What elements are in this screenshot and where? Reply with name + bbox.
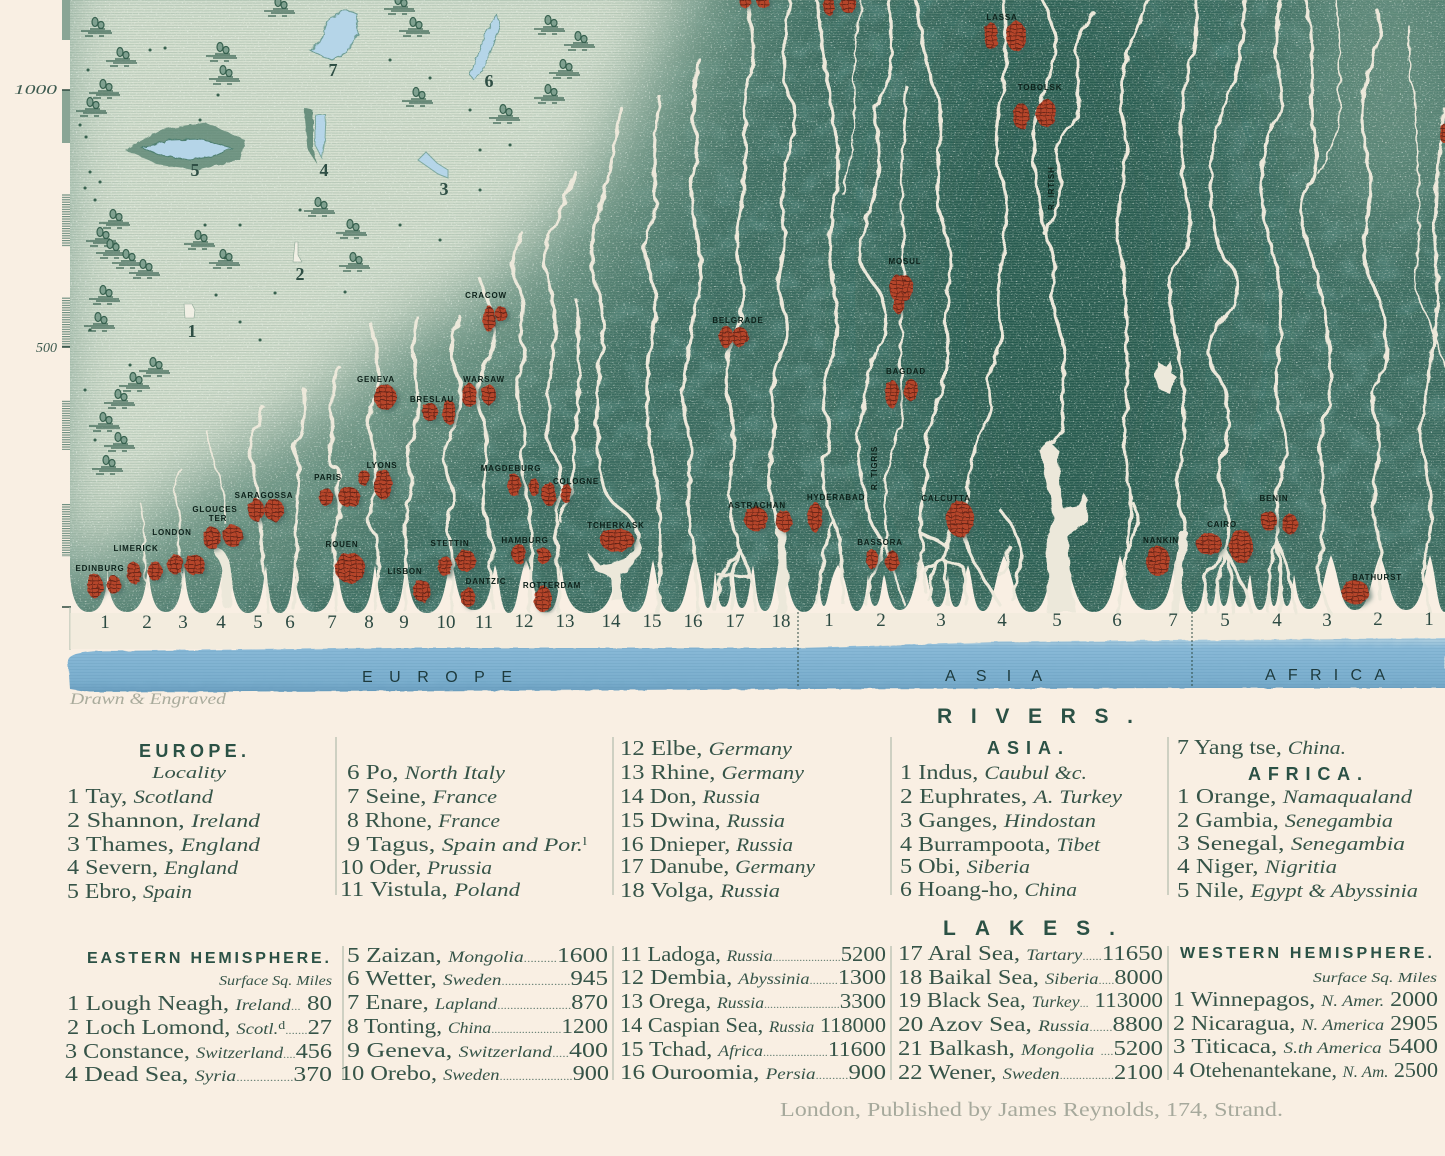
Yang tse and Africa rivers: 1 Orange, Namaqualand bbox=[1177, 784, 1413, 808]
rivers heading: RIVERS. bbox=[937, 705, 1133, 728]
river numbers on coast: 5 bbox=[1052, 610, 1062, 631]
Europe rivers column one: 3 Thames, England bbox=[67, 832, 261, 856]
Europe rivers column two: 10 Oder, Prussia bbox=[340, 855, 492, 879]
river numbers on coast: 4 bbox=[1272, 610, 1282, 631]
lake 1 bbox=[184, 304, 196, 341]
Yang tse and Africa rivers: AFRICA. bbox=[1248, 764, 1362, 784]
Eastern hemisphere column two: 9 Geneva, Switzerland .....400 bbox=[347, 1038, 608, 1062]
scale ruler bbox=[14, 0, 71, 607]
Eastern hemisphere column one: d bbox=[278, 1018, 285, 1032]
city names: LONDON bbox=[152, 528, 192, 537]
city names: NANKIN bbox=[1143, 536, 1179, 545]
lake 4 bbox=[304, 108, 328, 180]
lake 7 bbox=[310, 9, 358, 80]
Europe rivers column three: 17 Danube, Germany bbox=[620, 854, 816, 878]
Europe rivers column one: 4 Severn, England bbox=[67, 855, 239, 879]
Europe rivers column one: Locality bbox=[151, 763, 227, 782]
city names: BAGDAD bbox=[886, 367, 926, 376]
city names: BENIN bbox=[1260, 494, 1288, 503]
city names: ROUEN bbox=[326, 540, 358, 549]
cities: red blocks bbox=[87, 0, 1445, 612]
Asia rivers: 3 Ganges, Hindostan bbox=[900, 808, 1096, 832]
Europe rivers column one bbox=[67, 741, 261, 903]
city names: ROTTERDAM bbox=[523, 581, 581, 590]
Eastern hemisphere column two bbox=[340, 943, 609, 1085]
lake 6: 6 bbox=[484, 71, 494, 91]
city names: SARAGOSSA bbox=[235, 491, 293, 500]
river numbers on coast: 7 bbox=[1168, 610, 1178, 631]
river numbers on coast: 5 bbox=[1220, 610, 1230, 631]
city names: BELGRADE bbox=[712, 316, 764, 325]
Asia rivers: 2 Euphrates, A. Turkey bbox=[900, 784, 1123, 808]
Yang tse and Africa rivers: 3 Senegal, Senegambia bbox=[1177, 831, 1405, 855]
city names: LIMERICK bbox=[113, 544, 159, 553]
Western hemisphere column: Surface Sq. Miles bbox=[1313, 971, 1438, 986]
lakes list bbox=[65, 941, 1438, 1086]
scale label 500: 500 bbox=[36, 341, 57, 356]
Eastern hemisphere column one: 4 Dead Sea, Syria ................. 370 bbox=[65, 1062, 332, 1086]
publisher line: London, Published by James Reynolds, 174, Strand. bbox=[780, 1099, 1283, 1121]
city names: HAMBURG bbox=[501, 536, 549, 545]
river numbers on coast: 4 bbox=[216, 612, 226, 633]
river numbers on coast: 5 bbox=[253, 612, 263, 633]
Western hemisphere column: 4 Otehenantekane, N. Am. 2500 bbox=[1173, 1058, 1438, 1082]
lake 2 bbox=[293, 242, 304, 284]
Eastern hemisphere column three: 14 Caspian Sea, Russia 118000 bbox=[620, 1013, 886, 1037]
lake 3: 3 bbox=[440, 179, 448, 199]
river numbers on coast: 2 bbox=[1373, 609, 1383, 630]
lake 2: 2 bbox=[296, 264, 304, 284]
city names: CALCUTTA bbox=[921, 494, 971, 503]
Asia rivers: 4 Burrampoota, Tibet bbox=[900, 832, 1101, 856]
Europe rivers column two: 7 Seine, France bbox=[347, 784, 497, 808]
rivers of Africa bbox=[1205, 0, 1445, 612]
Asia rivers bbox=[900, 738, 1123, 901]
Eastern hemisphere column one: 2 Loch Lomond, Scotl. bbox=[67, 1015, 272, 1039]
lake 4: 4 bbox=[320, 160, 328, 180]
Asia rivers: 6 Hoang-ho, China bbox=[900, 877, 1077, 901]
Western hemisphere column: WESTERN HEMISPHERE. bbox=[1180, 945, 1432, 962]
Eastern hemisphere column two: 6 Wetter, Sweden ..................... 945 bbox=[347, 966, 608, 990]
Eastern hemisphere column four: 21 Balkash, Mongolia ....5200 bbox=[898, 1036, 1163, 1060]
Eastern hemisphere column three: 16 Ouroomia, Persia .......... 900 bbox=[620, 1060, 886, 1084]
city names: ASTRACHAN bbox=[728, 501, 786, 510]
city names bbox=[75, 13, 1402, 590]
city names: PARIS bbox=[314, 473, 342, 482]
Eastern hemisphere column two: 10 Orebo, Sweden ....................... 900 bbox=[340, 1061, 609, 1085]
Europe rivers column one: 2 Shannon, Ireland bbox=[67, 808, 261, 832]
river numbers on coast: 2 bbox=[876, 610, 886, 631]
city names: LYONS bbox=[367, 461, 397, 470]
river label Tigris: R. TIGRIS bbox=[870, 446, 879, 490]
Eastern hemisphere column three: 12 Dembia, Abyssinia .........1300 bbox=[620, 965, 886, 989]
river numbers on coast: 16 bbox=[684, 611, 702, 632]
river label Irtish: R. IRTISH bbox=[1047, 166, 1056, 210]
Asia rivers: 5 Obi, Siberia bbox=[900, 854, 1030, 878]
Yang tse and Africa rivers: 2 Gambia, Senegambia bbox=[1177, 808, 1393, 832]
mountains bbox=[76, 0, 595, 474]
city names: HYDERABAD bbox=[807, 493, 865, 502]
lake 7: 7 bbox=[328, 60, 338, 80]
lakes heading: LAKES. bbox=[943, 917, 1115, 940]
rivers of Asia bbox=[816, 0, 1197, 612]
Yang tse and Africa rivers: 5 Nile, Egypt & Abyssinia bbox=[1177, 878, 1418, 902]
Eastern hemisphere column two: 8 Tonting, China ....................... 1200 bbox=[347, 1014, 608, 1038]
city names: GENEVA bbox=[357, 375, 395, 384]
Eastern hemisphere column one: 27 bbox=[308, 1015, 329, 1039]
Europe rivers column one: EUROPE. bbox=[139, 741, 246, 761]
river numbers on coast: 10 bbox=[436, 612, 456, 633]
Western hemisphere column bbox=[1173, 945, 1438, 1082]
sea label Europe: EUROPE bbox=[362, 669, 512, 686]
Europe rivers column two: 8 Rhone, France bbox=[347, 808, 500, 832]
river numbers on coast: 6 bbox=[1112, 610, 1122, 631]
city names: EDINBURG bbox=[75, 564, 125, 573]
Yang tse and Africa rivers: 4 Niger, Nigritia bbox=[1177, 854, 1337, 878]
Eastern hemisphere column one: EASTERN HEMISPHERE. bbox=[87, 950, 329, 967]
lake 3 bbox=[418, 152, 448, 199]
river numbers on coast: 2 bbox=[142, 612, 152, 633]
city names: LISBON bbox=[387, 567, 423, 576]
Eastern hemisphere column one bbox=[65, 950, 333, 1086]
Eastern hemisphere column three: 13 Orega, Russia ......................... 3300 bbox=[620, 989, 886, 1013]
Eastern hemisphere column three: 11 Ladoga, Russia .......................5200 bbox=[620, 942, 886, 966]
river numbers on coast: 17 bbox=[726, 611, 744, 632]
city names: BATHURST bbox=[1352, 573, 1402, 582]
Eastern hemisphere column four bbox=[898, 941, 1163, 1084]
rivers list bbox=[67, 735, 1418, 903]
Eastern hemisphere column four: 20 Azov Sea, Russia .......8800 bbox=[898, 1012, 1163, 1036]
city names: TER bbox=[209, 514, 227, 523]
Eastern hemisphere column one: Surface Sq. Miles bbox=[219, 974, 333, 989]
river numbers on coast: 18 bbox=[772, 611, 790, 632]
city names: LASSA bbox=[986, 13, 1018, 22]
Europe rivers column three: 15 Dwina, Russia bbox=[620, 808, 785, 832]
Europe rivers column one: 5 Ebro, Spain bbox=[67, 879, 192, 903]
Europe rivers column two: l bbox=[583, 834, 588, 848]
city names: CRACOW bbox=[465, 291, 507, 300]
lakes bbox=[125, 9, 500, 341]
Western hemisphere column: 2 Nicaragua, N. America 2905 bbox=[1173, 1011, 1438, 1035]
river numbers on coast: 9 bbox=[399, 612, 409, 633]
Europe rivers column three: 16 Dnieper, Russia bbox=[620, 832, 793, 856]
city names: MAGDEBURG bbox=[481, 464, 541, 473]
Europe rivers column one: 1 Tay, Scotland bbox=[67, 784, 214, 808]
Europe rivers column three: 14 Don, Russia bbox=[620, 784, 760, 808]
river numbers on coast: 1 bbox=[100, 612, 110, 633]
city names: GLOUCES bbox=[192, 505, 238, 514]
column dividers bbox=[336, 737, 1168, 1080]
city names: TCHERKASK bbox=[587, 521, 645, 530]
city names: CAIRO bbox=[1207, 520, 1237, 529]
Europe rivers column three: 12 Elbe, Germany bbox=[620, 736, 793, 760]
city names: STETTIN bbox=[431, 539, 469, 548]
river numbers on coast: 13 bbox=[556, 611, 574, 632]
Europe rivers column three: 13 Rhine, Germany bbox=[620, 760, 805, 784]
river numbers on coast: 8 bbox=[364, 612, 374, 633]
Asia rivers: ASIA. bbox=[987, 738, 1063, 758]
engraver credit: Drawn & Engraved bbox=[69, 691, 227, 708]
Eastern hemisphere column four: 18 Baikal Sea, Siberia .....8000 bbox=[898, 965, 1163, 989]
lake 6 bbox=[470, 15, 500, 91]
Europe rivers column two: 11 Vistula, Poland bbox=[340, 877, 521, 901]
Asia rivers: 1 Indus, Caubul &c. bbox=[900, 760, 1087, 784]
lake 5 bbox=[125, 122, 245, 180]
city names: TOBOLSK bbox=[1018, 83, 1062, 92]
Eastern hemisphere column three: 15 Tchad, Africa ..................... 11600 bbox=[620, 1037, 886, 1061]
Europe rivers column two bbox=[340, 760, 588, 901]
river numbers on coast: 4 bbox=[997, 610, 1007, 631]
sea band bbox=[68, 612, 1445, 692]
city names: MOSUL bbox=[889, 257, 921, 266]
Eastern hemisphere column two: 5 Zaizan, Mongolia .......... 1600 bbox=[347, 943, 608, 967]
river numbers on coast: 12 bbox=[514, 611, 534, 632]
Eastern hemisphere column four: 19 Black Sea, Turkey ... 113000 bbox=[898, 988, 1163, 1012]
river numbers on coast: 14 bbox=[602, 611, 621, 632]
river numbers on coast: 11 bbox=[475, 612, 493, 633]
rivers of Europe bbox=[140, 0, 795, 612]
Eastern hemisphere column three bbox=[620, 942, 886, 1084]
river numbers on coast: 1 bbox=[1424, 609, 1434, 630]
Europe rivers column two: 9 Tagus, Spain and Por. bbox=[347, 832, 554, 856]
scale label 1000: 1000 bbox=[14, 83, 57, 98]
river numbers on coast: 3 bbox=[178, 612, 188, 633]
river numbers on coast: 6 bbox=[285, 612, 295, 633]
river numbers on coast: 3 bbox=[936, 610, 946, 631]
city names: BRESLAU bbox=[410, 395, 454, 404]
Eastern hemisphere column one: 1 Lough Neagh, Ireland ... 80 bbox=[67, 991, 332, 1015]
Eastern hemisphere column one: ....... bbox=[285, 1025, 308, 1037]
Eastern hemisphere column four: 17 Aral Sea, Tartary ......11650 bbox=[898, 941, 1163, 965]
river numbers on coast: 7 bbox=[327, 612, 337, 633]
river numbers on coast: 3 bbox=[1322, 610, 1332, 631]
river numbers on coast: 15 bbox=[642, 611, 662, 632]
Western hemisphere column: 1 Winnepagos, N. Amer. 2000 bbox=[1173, 987, 1438, 1011]
city names: DANTZIC bbox=[466, 577, 506, 586]
Western hemisphere column: 3 Titicaca, S.th America 5400 bbox=[1173, 1034, 1438, 1058]
city names: WARSAW bbox=[463, 375, 505, 384]
sea label Africa: AFRICA bbox=[1265, 667, 1385, 684]
Eastern hemisphere column two: 7 Enare, Lapland ....................... 870 bbox=[347, 990, 608, 1014]
city names: COLOGNE bbox=[553, 477, 599, 486]
terrain: green land mass bbox=[50, 0, 1445, 640]
Yang tse and Africa rivers: 7 Yang tse, China. bbox=[1177, 735, 1346, 759]
river numbers on coast bbox=[100, 609, 1434, 633]
Europe rivers column three: 18 Volga, Russia bbox=[620, 878, 780, 902]
city names: BASSORA bbox=[857, 538, 903, 547]
lake 5: 5 bbox=[190, 160, 200, 180]
lake 1: 1 bbox=[188, 321, 196, 341]
Eastern hemisphere column one: 3 Constance, Switzerland ....456 bbox=[65, 1039, 332, 1063]
left frame line and rule to sea bbox=[69, 607, 71, 650]
sea label Asia: ASIA bbox=[945, 668, 1042, 685]
Europe rivers column two: 6 Po, North Italy bbox=[347, 760, 506, 784]
Yang tse and Africa rivers bbox=[1177, 735, 1418, 902]
Eastern hemisphere column four: 22 Wener, Sweden ................. 2100 bbox=[898, 1060, 1163, 1084]
river numbers on coast: 1 bbox=[824, 610, 834, 631]
Europe rivers column three bbox=[620, 736, 816, 902]
